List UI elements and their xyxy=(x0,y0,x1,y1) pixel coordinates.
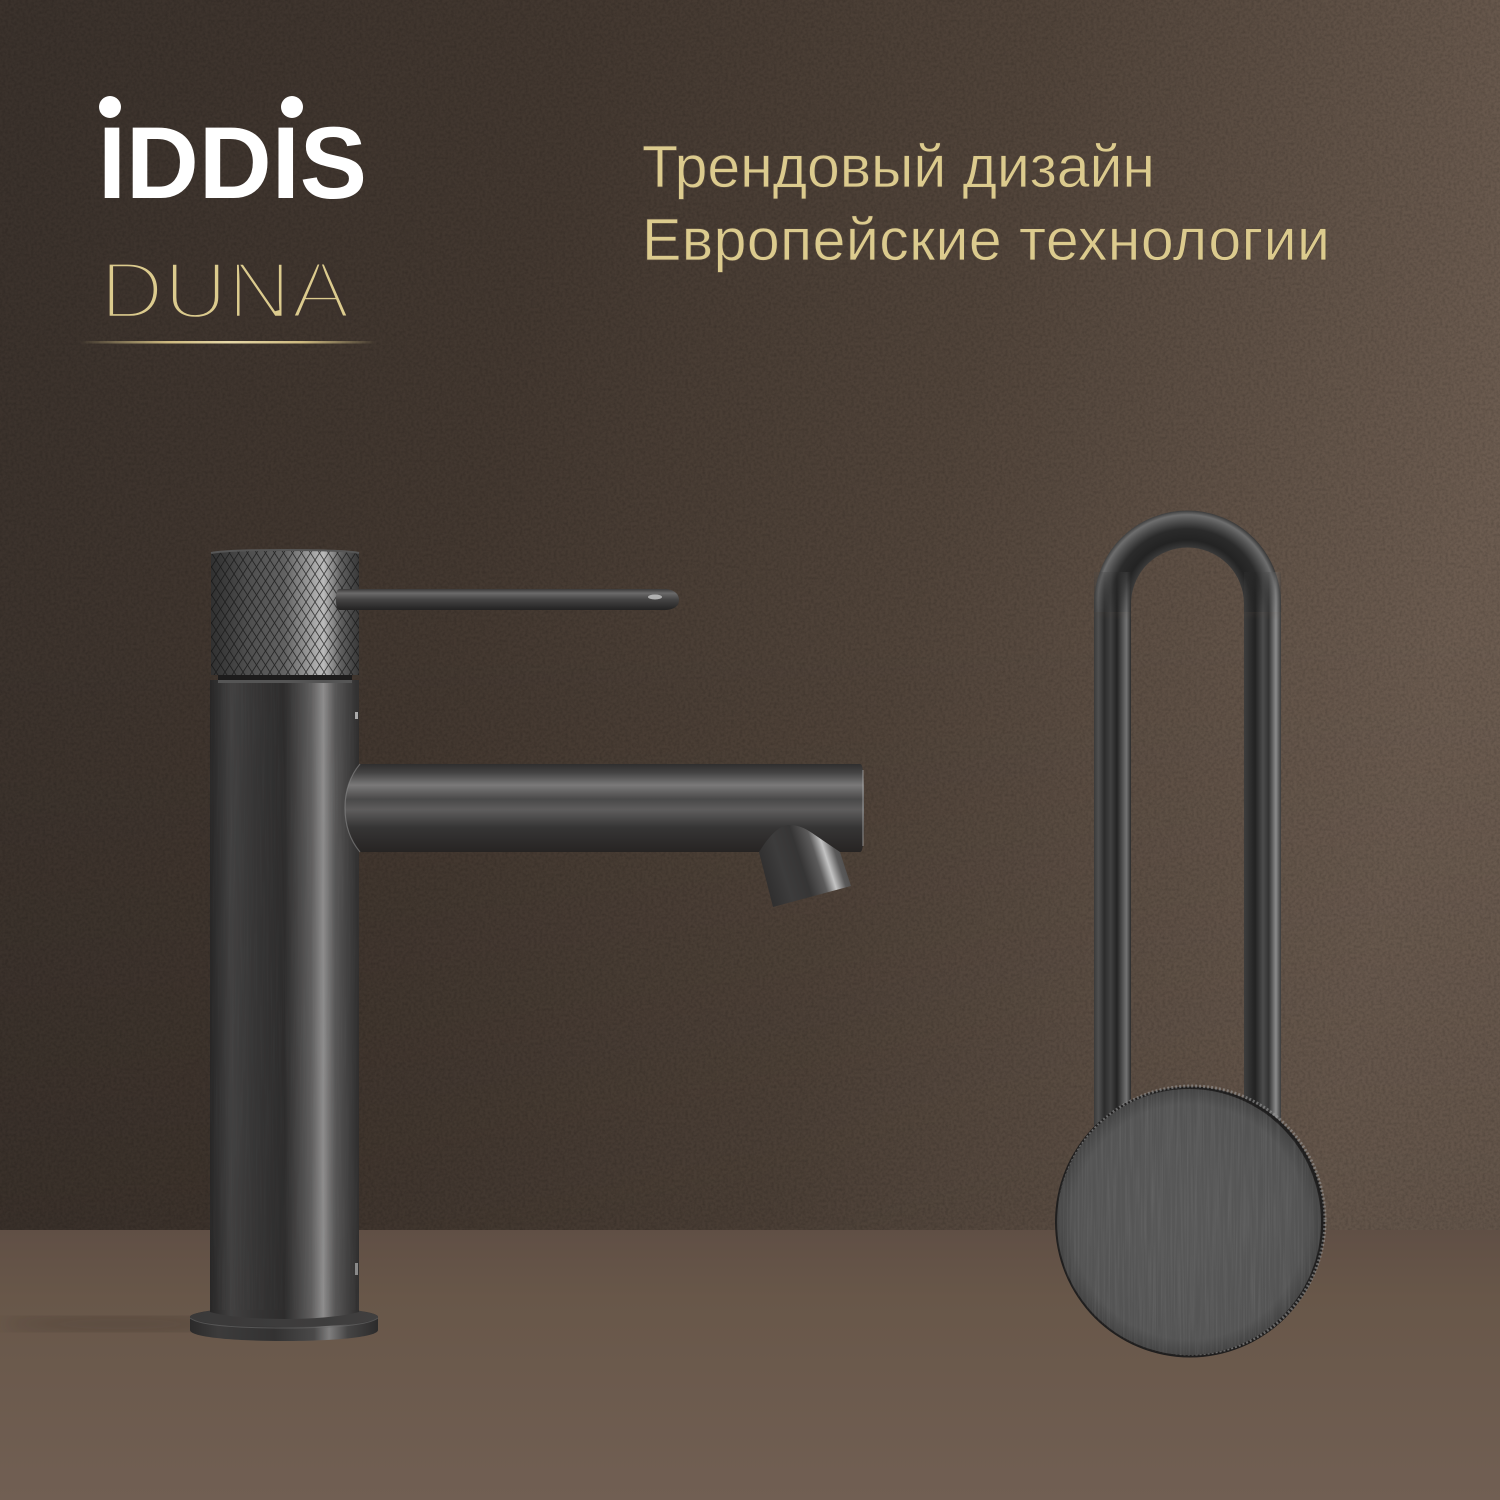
knurled handle cap xyxy=(211,550,359,675)
spout xyxy=(345,764,864,852)
faucet: side view xyxy=(190,550,864,1341)
tagline xyxy=(642,134,1330,273)
round disc xyxy=(1055,1086,1325,1358)
aerator nozzle xyxy=(759,825,851,907)
countertop xyxy=(0,1230,1500,1500)
tagline: Европейские технологии xyxy=(642,207,1330,273)
faucet body xyxy=(210,674,359,1319)
lever handle xyxy=(336,589,679,610)
faucet shadow on counter xyxy=(0,1317,240,1331)
loop handle: front view xyxy=(1055,529,1325,1358)
brand logo: IDDIS xyxy=(98,106,367,220)
loop tube xyxy=(1094,529,1281,1132)
series name: DUNA xyxy=(100,246,350,336)
tagline: Трендовый дизайн xyxy=(642,134,1155,200)
faucet base xyxy=(190,1307,378,1341)
gold divider xyxy=(80,341,376,344)
